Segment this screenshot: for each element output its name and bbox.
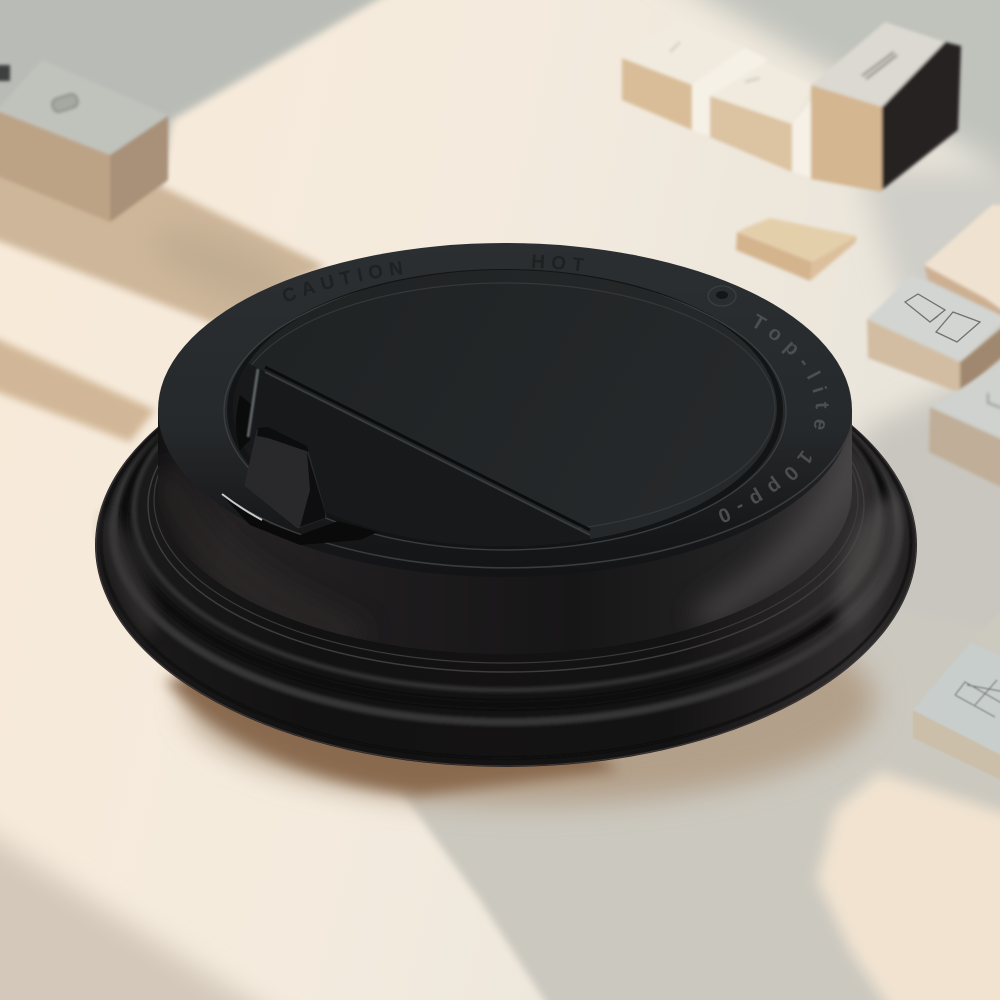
blocks: top right row bbox=[620, 20, 961, 192]
embossed text: caution: CAUTION bbox=[283, 261, 402, 301]
coffee lid bbox=[95, 243, 917, 767]
block: small flat tile bbox=[736, 218, 857, 281]
icon: cube glyph bbox=[905, 294, 980, 342]
light patch bottom right bbox=[817, 772, 1000, 1000]
lid top rim bbox=[158, 243, 853, 574]
block: icon cube bbox=[867, 275, 1000, 393]
shadow under lid bbox=[165, 596, 875, 804]
embossed text: brand: Top-lite 10pp-0 bbox=[719, 314, 829, 522]
embossed circle mark bbox=[708, 286, 736, 306]
block: cone wedge bbox=[924, 205, 1000, 318]
block: top left bbox=[0, 60, 168, 222]
lid sip opening bbox=[222, 369, 378, 545]
lid lever tab bbox=[246, 427, 325, 527]
lid recessed panel bbox=[248, 270, 777, 539]
lid flange bbox=[95, 323, 917, 767]
lid raised wall bbox=[158, 410, 862, 654]
block: lower right cube bbox=[929, 362, 1000, 489]
block: bottom right cube bbox=[913, 608, 1000, 782]
embossed text: hot: HOT bbox=[532, 254, 584, 271]
lid inner ridges bbox=[224, 269, 786, 551]
